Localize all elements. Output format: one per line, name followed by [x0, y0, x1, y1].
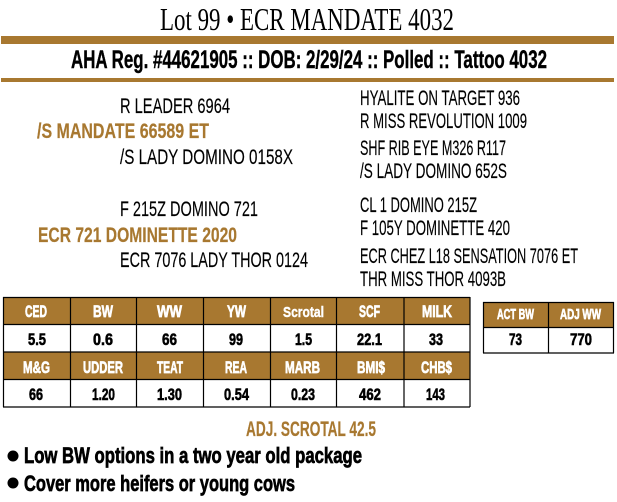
weights headers	[497, 307, 601, 323]
EPD headers row 2: BMI$	[357, 359, 385, 377]
actual weights table	[483, 302, 614, 353]
title: Lot 99 • ECR MANDATE 4032	[160, 1, 454, 37]
EPD headers row 1: YW	[227, 303, 246, 321]
table grid	[483, 302, 614, 353]
EPD headers row 1: SCF	[359, 303, 380, 321]
ancestor: CL 1 DOMINO 215Z	[360, 194, 477, 217]
ancestor: THR MISS THOR 4093B	[360, 268, 506, 291]
dam's dam: ECR 7076 LADY THOR 0124	[120, 249, 308, 272]
ancestor: F 105Y DOMINETTE 420	[360, 217, 510, 240]
adjusted scrotal note: ADJ. SCROTAL 42.5	[246, 418, 376, 441]
pedigree: sire side	[37, 95, 293, 169]
sire's dam: /S LADY DOMINO 0158X	[120, 146, 293, 169]
dam name: ECR 721 DOMINETTE 2020	[38, 224, 237, 247]
EPD values row 1: 0.6	[93, 331, 113, 349]
EPD values row 1: 5.5	[28, 331, 46, 349]
table grid	[3, 297, 470, 407]
EPD headers row 2	[23, 359, 452, 377]
EPD values row 1: 1.5	[295, 331, 312, 349]
EPD values row 1: 99	[229, 331, 243, 349]
pedigree: outer ancestors	[360, 87, 578, 291]
ancestor: /S LADY DOMINO 652S	[360, 160, 507, 183]
EPD values row 2: 143	[426, 386, 445, 404]
ancestor: HYALITE ON TARGET 936	[360, 87, 520, 110]
EPD values row 1: 33	[429, 331, 443, 349]
weights values: 770	[570, 331, 592, 349]
EPD values row 1: 66	[162, 331, 177, 349]
ancestor: SHF RIB EYE M326 R117	[360, 137, 506, 160]
EPD values row 1	[28, 331, 443, 349]
EPD headers row 2: UDDER	[83, 359, 123, 377]
EPD headers row 1: CED	[25, 303, 47, 321]
EPD headers row 2: TEAT	[157, 359, 183, 377]
dam's sire: F 215Z DOMINO 721	[120, 198, 258, 221]
weights values: 73	[509, 331, 522, 349]
EPD headers row 2: REA	[225, 359, 247, 377]
EPD values row 2: 0.54	[224, 386, 250, 404]
sire's sire: R LEADER 6964	[120, 95, 230, 118]
bullet point 2: Cover more heifers or young cows	[24, 471, 295, 496]
pedigree: dam side	[38, 198, 308, 272]
EPD values row 2: 0.23	[291, 386, 315, 404]
EPD headers row 1: BW	[93, 303, 113, 321]
lower gold rule	[1, 78, 614, 82]
header band row 1	[3, 297, 470, 324]
header band	[483, 302, 613, 327]
EPD values row 1: 22.1	[357, 331, 382, 349]
EPD values row 2: 1.30	[157, 386, 182, 404]
top gold rule	[1, 36, 614, 44]
EPD values row 2: 66	[29, 386, 43, 404]
weights values	[509, 331, 592, 349]
EPD headers row 2: CHB$	[421, 359, 452, 377]
EPD headers row 1: Scrotal	[283, 304, 324, 321]
EPD headers row 2: MARB	[285, 359, 320, 377]
EPD headers row 1: WW	[157, 303, 182, 321]
weights headers: ACT BW	[497, 307, 534, 323]
EPD table	[3, 297, 470, 407]
EPD headers row 1	[25, 303, 452, 321]
EPD values row 2	[29, 386, 445, 404]
EPD values row 2: 462	[359, 386, 381, 404]
header band row 2	[3, 352, 470, 379]
EPD headers row 1: MILK	[422, 303, 452, 321]
EPD values row 2: 1.20	[92, 386, 115, 404]
EPD headers row 2: M&G	[23, 359, 50, 377]
sire name: /S MANDATE 66589 ET	[37, 120, 209, 143]
bullet point 1: Low BW options in a two year old package	[24, 443, 362, 468]
